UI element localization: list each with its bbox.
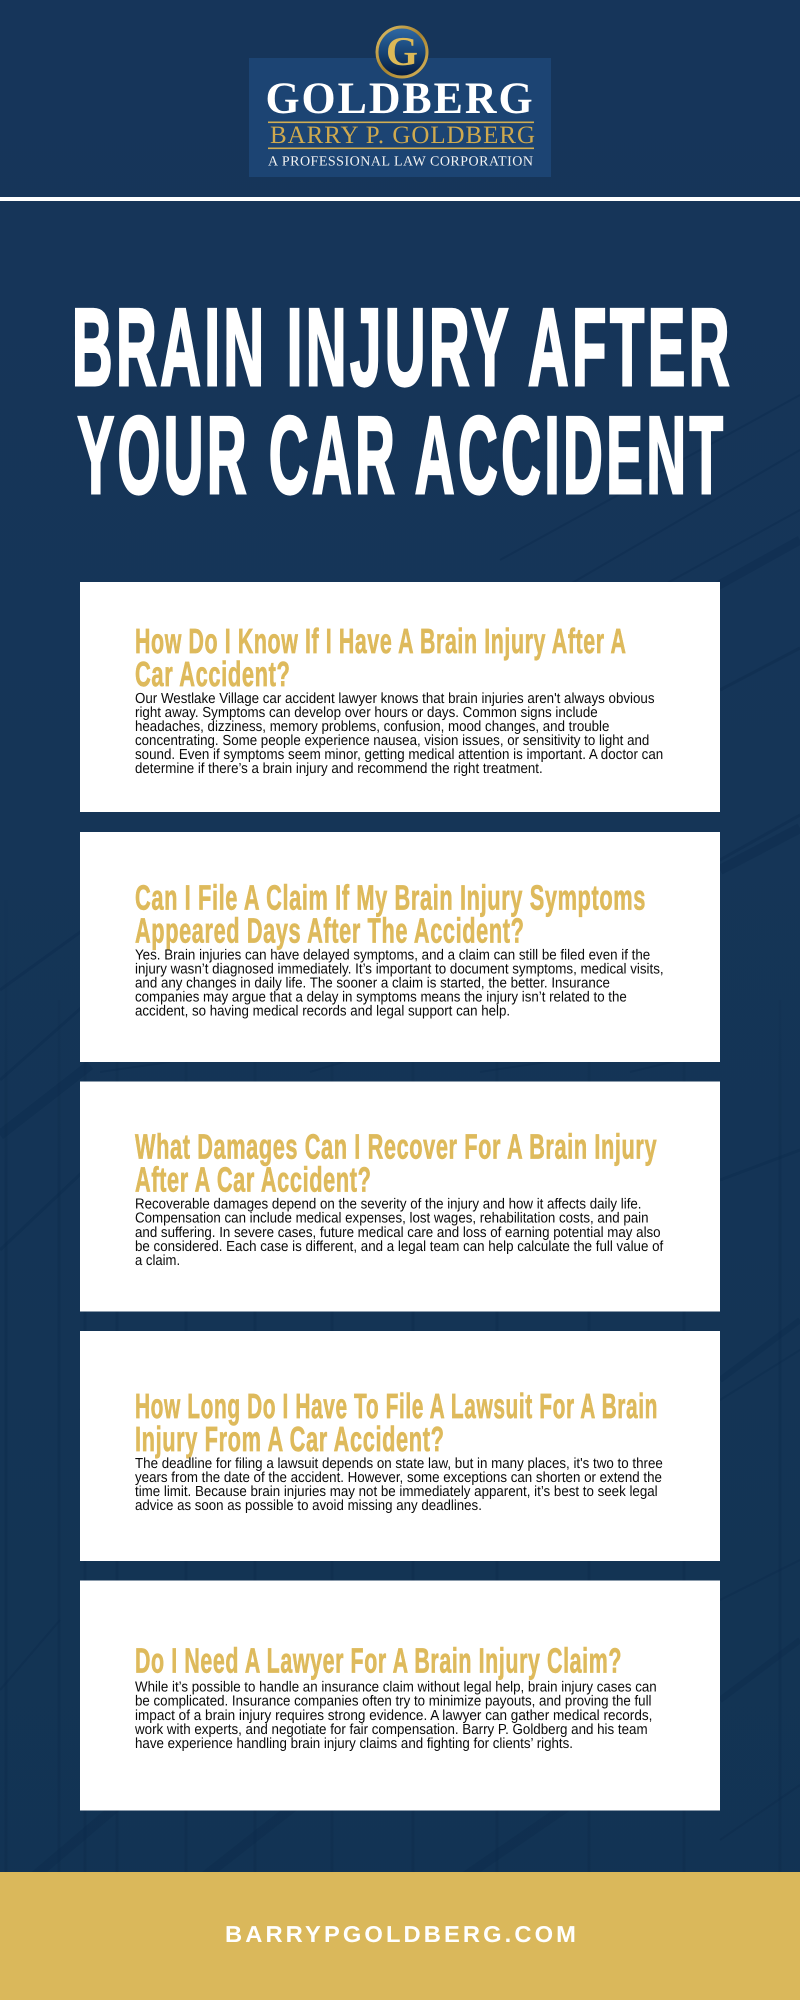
heading: recoverable damages: After A Car Accident?	[135, 1160, 372, 1200]
panel: delayed symptoms claim	[80, 832, 720, 1062]
icon: G medallion	[377, 27, 427, 77]
text block: delayed symptoms claim: Yes. Brain injuries can have delayed symptoms, and a claim can still be filed even if the	[135, 947, 650, 963]
panel: filing deadline	[80, 1331, 720, 1561]
text block: need a lawyer: impact of a brain injury requires strong evidence. A lawyer can gather medical records,	[135, 1708, 652, 1724]
text block: delayed symptoms claim: accident, so having medical records and legal support can help.	[135, 1004, 510, 1020]
heading: how do I know: Car Accident?	[135, 655, 290, 694]
header divider	[0, 197, 800, 201]
footer band	[0, 1872, 800, 2000]
text block: recoverable damages: Recoverable damages depend on the severity of the injury and how it affects daily life.	[135, 1197, 642, 1213]
logo gold rules and name: BARRY P. GOLDBERG	[270, 122, 536, 149]
title	[72, 286, 733, 517]
text block: need a lawyer: be complicated. Insurance companies often try to minimize payouts, and proving the full	[135, 1694, 652, 1710]
logo	[249, 27, 551, 177]
text block: delayed symptoms claim: companies may argue that a delay in symptoms means the injury isn’t related to the	[135, 989, 627, 1005]
footer website: BARRYPGOLDBERG.COM	[225, 1921, 579, 1947]
heading: filing deadline	[135, 1387, 658, 1459]
text block: how do I know: Our Westlake Village car accident lawyer knows that brain injuries aren't always obvious	[135, 691, 654, 707]
heading: filing deadline: Injury From A Car Accident?	[135, 1420, 444, 1459]
text block: delayed symptoms claim: and any changes in daily life. The sooner a claim is started, the better. Insurance	[135, 975, 610, 991]
text block: filing deadline: time limit. Because brain injuries may not be immediately apparent, it’s best to seek legal	[135, 1484, 658, 1500]
text block: how do I know	[135, 691, 663, 777]
logo tagline: A PROFESSIONAL LAW CORPORATION	[268, 154, 533, 170]
text block: recoverable damages: a claim.	[135, 1253, 180, 1269]
text block: filing deadline: advice as soon as possible to avoid missing any deadlines.	[135, 1498, 482, 1514]
text block: how do I know: determine if there’s a brain injury and recommend the right treatment.	[135, 761, 543, 777]
panel: need a lawyer	[80, 1580, 720, 1810]
text block: how do I know: right away. Symptoms can develop over hours or days. Common signs include	[135, 705, 598, 721]
text block: delayed symptoms claim	[135, 947, 664, 1020]
text block: how do I know: concentrating. Some people experience nausea, vision issues, or sensitivity to light and	[135, 733, 649, 749]
panel: recoverable damages	[80, 1082, 720, 1312]
text block: need a lawyer: While it’s possible to handle an insurance claim without legal help, brain injury cases can	[135, 1680, 657, 1696]
text block: how do I know: sound. Even if symptoms seem minor, getting medical attention is important. A doctor can	[135, 747, 663, 763]
text block: need a lawyer: have experience handling brain injury claims and fighting for clients’ rights.	[135, 1736, 573, 1752]
text block: recoverable damages: be considered. Each case is different, and a legal team can help calculate the full value of	[135, 1239, 664, 1255]
heading: recoverable damages	[135, 1128, 657, 1200]
heading: delayed symptoms claim	[135, 878, 646, 950]
text block: need a lawyer	[134, 1680, 657, 1752]
text block: filing deadline: The deadline for filing a lawsuit depends on state law, but in many places, it's two to three	[135, 1456, 663, 1472]
logo panel	[249, 58, 551, 177]
panel: how do I know	[80, 582, 720, 812]
heading: delayed symptoms claim: Appeared Days After The Accident?	[135, 911, 524, 950]
text block: delayed symptoms claim: injury wasn’t diagnosed immediately. It’s important to document symptoms, medical visits,	[135, 961, 664, 977]
icon: G medallion: G	[386, 28, 418, 74]
text block: recoverable damages: Compensation can include medical expenses, lost wages, rehabilitation costs, and pain	[135, 1211, 648, 1227]
logo wordmark: GOLDBERG	[266, 73, 534, 123]
heading: how do I know	[135, 622, 626, 694]
text block: recoverable damages: and suffering. In severe cases, future medical care and loss of earning potential may also	[135, 1225, 661, 1241]
text block: need a lawyer: work with experts, and negotiate for fair compensation. Barry P. Goldberg and his team	[134, 1722, 648, 1738]
text block: how do I know: headaches, dizziness, memory problems, confusion, mood changes, and trouble	[135, 719, 609, 735]
text block: filing deadline	[135, 1456, 663, 1514]
text block: filing deadline: years from the date of the accident. However, some exceptions can shorten or extend the	[135, 1470, 662, 1486]
text block: recoverable damages	[135, 1197, 664, 1269]
